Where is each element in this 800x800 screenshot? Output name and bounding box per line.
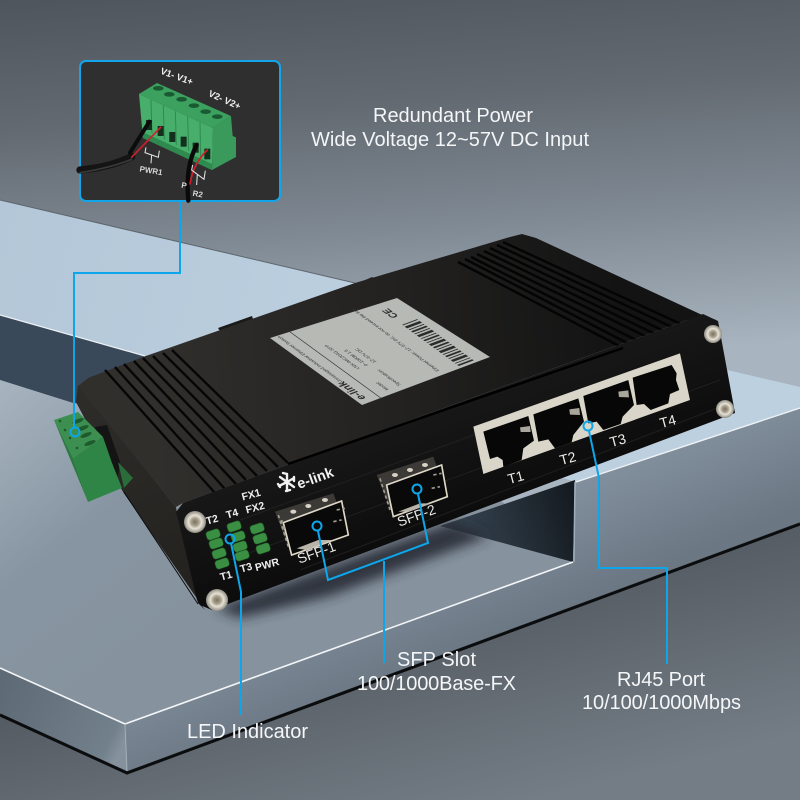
label: SFP slot: 100/1000Base-FX — [357, 673, 516, 695]
LED indicators — [205, 520, 271, 570]
product label: e-link — [334, 379, 369, 401]
platform dark step face — [0, 315, 260, 420]
device left side face — [76, 385, 205, 610]
screws — [184, 325, 734, 611]
LED labels: T4 — [225, 507, 240, 521]
product label: 0~1000M 1.5 — [342, 349, 369, 367]
heading: redundant power: Redundant Power — [373, 105, 533, 127]
SFP labels: SFP-1 — [295, 538, 338, 567]
heading: redundant power — [311, 105, 589, 151]
power callout line — [70, 202, 180, 436]
device front face — [176, 314, 735, 610]
label: RJ45 port — [582, 669, 741, 714]
logo: e-link — [278, 464, 337, 493]
SFP slot 1 — [275, 493, 348, 555]
inset labels: V1- V1+ — [159, 66, 195, 87]
inset labels: P — [181, 181, 188, 191]
product label: Unmanaged Industrial Ethernet Switch — [276, 335, 344, 383]
RJ45 labels: T3 — [608, 430, 628, 450]
platform left face — [0, 668, 127, 771]
DIN rail clips — [218, 277, 378, 334]
callout lines — [70, 202, 667, 715]
LED callout line — [226, 534, 241, 715]
LED labels: T3 — [239, 561, 254, 575]
product label: Specification: — [375, 369, 402, 386]
LED labels: FX2 — [244, 500, 266, 516]
device cast shadow — [215, 522, 490, 618]
RJ45 labels — [506, 411, 678, 487]
LED labels: PWR — [254, 556, 281, 574]
inset labels: V2- V2+ — [207, 88, 243, 112]
RJ45 labels: T4 — [658, 411, 678, 431]
platform notch shadow — [440, 480, 575, 562]
heat sink ribs left — [105, 350, 288, 493]
label: SFP slot: SFP Slot — [397, 649, 476, 671]
SFP labels — [295, 501, 438, 567]
SFP callout lines — [312, 484, 428, 663]
product label: CE — [380, 307, 402, 319]
label: RJ45 port: 10/100/1000Mbps — [582, 692, 741, 714]
device top face — [78, 234, 716, 507]
LED labels: FX1 — [240, 487, 262, 503]
label: SFP slot — [357, 649, 516, 695]
LED labels — [205, 487, 281, 583]
heat sink ribs right — [458, 242, 683, 348]
SFP slot 2 — [377, 457, 447, 517]
floor — [0, 510, 800, 800]
product label — [270, 295, 490, 405]
terminal block connector on device side — [54, 412, 133, 502]
inset terminal block — [139, 83, 236, 170]
terminal block front face — [73, 437, 122, 502]
product label: LNK-IMC204G-SFP — [323, 344, 361, 370]
RJ45 labels: T2 — [558, 448, 578, 468]
LED labels: T1 — [219, 569, 234, 583]
inset labels — [139, 66, 243, 200]
LED labels: T2 — [205, 513, 220, 527]
platform — [0, 200, 800, 773]
inset brackets — [145, 147, 205, 185]
platform upper top surface — [0, 200, 800, 482]
inset labels: PWR1 — [139, 164, 164, 177]
RJ45 ports — [473, 353, 690, 474]
device: industrial switch — [54, 234, 735, 611]
heading: redundant power: Wide Voltage 12~57V DC Input — [311, 129, 589, 151]
logo: e-link: e-link — [295, 464, 337, 493]
product label: Ethernet Power: 12~57V DC, do not exceed the limit — [349, 307, 440, 372]
product label: Model: — [374, 381, 390, 391]
terminal block top face — [54, 412, 103, 458]
RJ45 labels: T1 — [506, 467, 526, 487]
label: LED indicator: LED Indicator — [187, 721, 308, 743]
inset wires — [80, 122, 207, 201]
inset labels: R2 — [192, 189, 204, 200]
product label: 12~57V DC — [353, 347, 378, 363]
platform lower top surface — [0, 380, 573, 724]
SFP labels: SFP-2 — [395, 501, 438, 530]
inset panel: terminal close-up — [80, 61, 280, 201]
platform front face — [125, 408, 800, 771]
RJ45 callout line — [584, 422, 667, 664]
label: RJ45 port: RJ45 Port — [617, 669, 705, 691]
